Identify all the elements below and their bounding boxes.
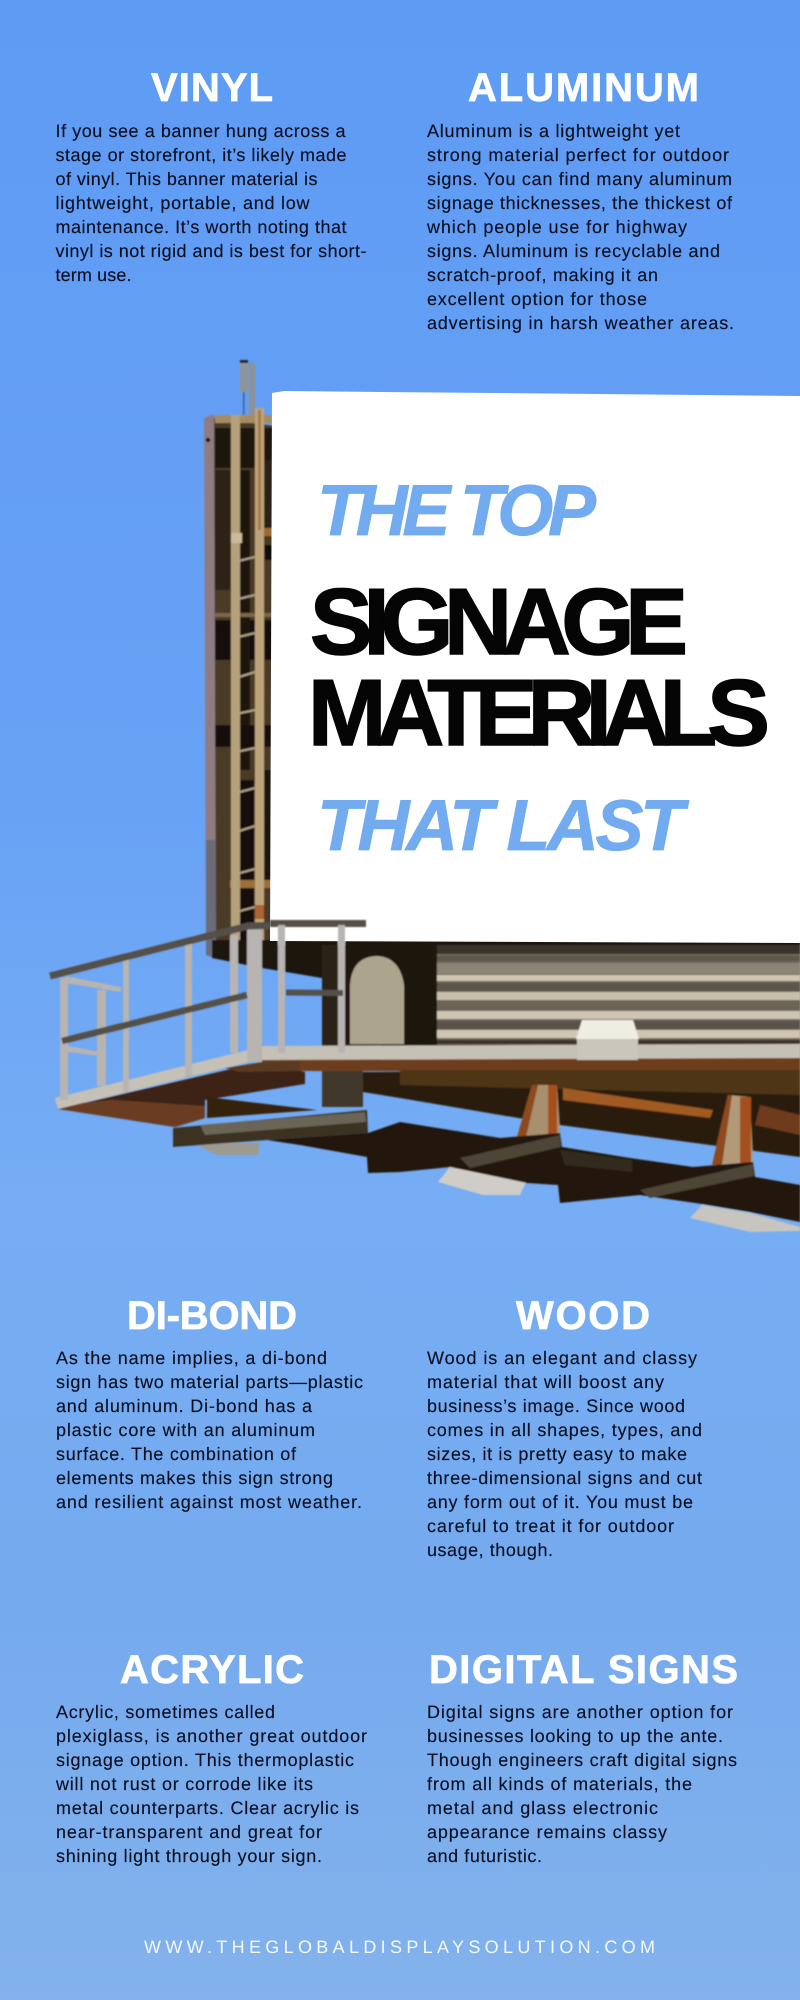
text block: aluminum: scratch-proof, making it an	[427, 265, 658, 285]
text block: wood: any form out of it. You must be	[427, 1492, 693, 1512]
text block: acrylic: signage option. This thermoplastic	[56, 1750, 354, 1770]
tower back panel	[214, 415, 275, 966]
railing	[50, 924, 366, 1100]
text block: vinyl: stage or storefront, it’s likely made	[56, 145, 346, 165]
panel: acrylic	[55, 1648, 367, 1866]
panel: digital signs	[427, 1648, 738, 1866]
text block: aluminum: excellent option for those	[427, 289, 647, 309]
text block: wood	[427, 1348, 702, 1560]
title: THE TOP	[317, 471, 597, 551]
title	[308, 471, 770, 866]
text block: acrylic	[55, 1702, 367, 1866]
railing front over sign	[270, 920, 366, 945]
lamps	[193, 1143, 260, 1155]
text block: aluminum: signs. Aluminum is recyclable and	[427, 241, 720, 261]
beams	[173, 1110, 368, 1147]
heading: digital signs: DIGITAL SIGNS	[429, 1648, 738, 1692]
heading: aluminum: ALUMINUM	[468, 66, 699, 110]
text block: acrylic: near-transparent and great for	[56, 1822, 322, 1842]
text block: vinyl: vinyl is not rigid and is best for short-	[56, 241, 366, 261]
text block: wood: sizes, it is pretty easy to make	[427, 1444, 687, 1464]
title: SIGNAGE	[310, 569, 688, 674]
billboard sign	[270, 391, 800, 943]
text block: digital signs	[427, 1702, 737, 1866]
text block: aluminum: signs. You can find many aluminum	[427, 169, 732, 189]
tower side beam	[204, 414, 216, 958]
text block: vinyl: maintenance. It’s worth noting that	[56, 217, 346, 237]
text block: acrylic: metal counterparts. Clear acrylic is	[56, 1798, 359, 1818]
text block: aluminum: Aluminum is a lightweight yet	[427, 121, 680, 141]
billboard photo: tower, platform and supports	[50, 360, 800, 1232]
corrugated metal panel	[437, 945, 800, 1045]
text block: di-bond: and resilient against most weather.	[56, 1492, 362, 1512]
text block: wood: usage, though.	[427, 1540, 553, 1560]
text block: aluminum: advertising in harsh weather areas.	[427, 313, 734, 333]
text block: di-bond: As the name implies, a di-bond	[56, 1348, 327, 1368]
text block: acrylic: shining light through your sign.	[56, 1846, 322, 1866]
mesh supports	[517, 1085, 560, 1137]
text block: wood: three-dimensional signs and cut	[427, 1468, 702, 1488]
panel: aluminum	[426, 66, 734, 333]
text block: di-bond: surface. The combination of	[56, 1444, 297, 1464]
dark underframe	[363, 1070, 800, 1157]
title: MATERIALS	[308, 660, 770, 765]
text block: acrylic: will not rust or corrode like its	[55, 1774, 313, 1794]
ladder	[231, 408, 264, 945]
lower supports and beams	[58, 1045, 800, 1232]
text block: wood: comes in all shapes, types, and	[427, 1420, 702, 1440]
text block: di-bond: plastic core with an aluminum	[56, 1420, 315, 1440]
text block: digital signs: Digital signs are another option for	[427, 1702, 733, 1722]
text block: aluminum: signage thicknesses, the thickest of	[427, 193, 733, 213]
text block: aluminum: which people use for highway	[426, 217, 687, 237]
title: THAT LAST	[317, 786, 690, 866]
column	[322, 1045, 363, 1107]
text block: acrylic: plexiglass, is another great outdoor	[56, 1726, 367, 1746]
text block: digital signs: Though engineers craft digital signs	[427, 1750, 737, 1770]
heading: wood: WOOD	[516, 1294, 650, 1338]
small white box	[576, 1020, 639, 1060]
dark housing under the sign	[212, 940, 800, 1046]
text block: digital signs: businesses looking to up the ante.	[427, 1726, 723, 1746]
text block: vinyl: lightweight, portable, and low	[56, 193, 310, 213]
deck edge	[55, 1044, 800, 1109]
text block: wood: careful to treat it for outdoor	[427, 1516, 674, 1536]
text block: digital signs: and futuristic.	[427, 1846, 542, 1866]
text block: vinyl: term use.	[56, 265, 132, 285]
text block: vinyl: If you see a banner hung across a	[56, 121, 346, 141]
heading: vinyl: VINYL	[151, 66, 273, 110]
text block: aluminum: strong material perfect for outdoor	[427, 145, 729, 165]
antenna	[240, 360, 255, 563]
text block: vinyl: of vinyl. This banner material is	[56, 169, 318, 189]
panel: vinyl	[56, 66, 366, 285]
text block: wood: business’s image. Since wood	[427, 1396, 685, 1416]
panel: wood	[427, 1294, 702, 1560]
panel: di-bond	[56, 1294, 363, 1512]
text block: digital signs: metal and glass electronic	[427, 1798, 658, 1818]
text block: di-bond: sign has two material parts—plastic	[56, 1372, 363, 1392]
text block: acrylic: Acrylic, sometimes called	[56, 1702, 275, 1722]
text block: di-bond: elements makes this sign strong	[56, 1468, 333, 1488]
footer website: WWW.THEGLOBALDISPLAYSOLUTION.COM	[144, 1937, 655, 1957]
heading: di-bond: DI-BOND	[127, 1294, 297, 1338]
text block: di-bond	[56, 1348, 363, 1512]
text block: di-bond: and aluminum. Di-bond has a	[56, 1396, 313, 1416]
text block: aluminum	[426, 121, 734, 333]
text block: wood: Wood is an elegant and classy	[427, 1348, 697, 1368]
text block: digital signs: appearance remains classy	[427, 1822, 667, 1842]
text block: digital signs: from all kinds of materials, the	[427, 1774, 692, 1794]
text block: vinyl	[56, 121, 366, 285]
text block: wood: material that will boost any	[427, 1372, 664, 1392]
heading: acrylic: ACRYLIC	[120, 1648, 304, 1692]
